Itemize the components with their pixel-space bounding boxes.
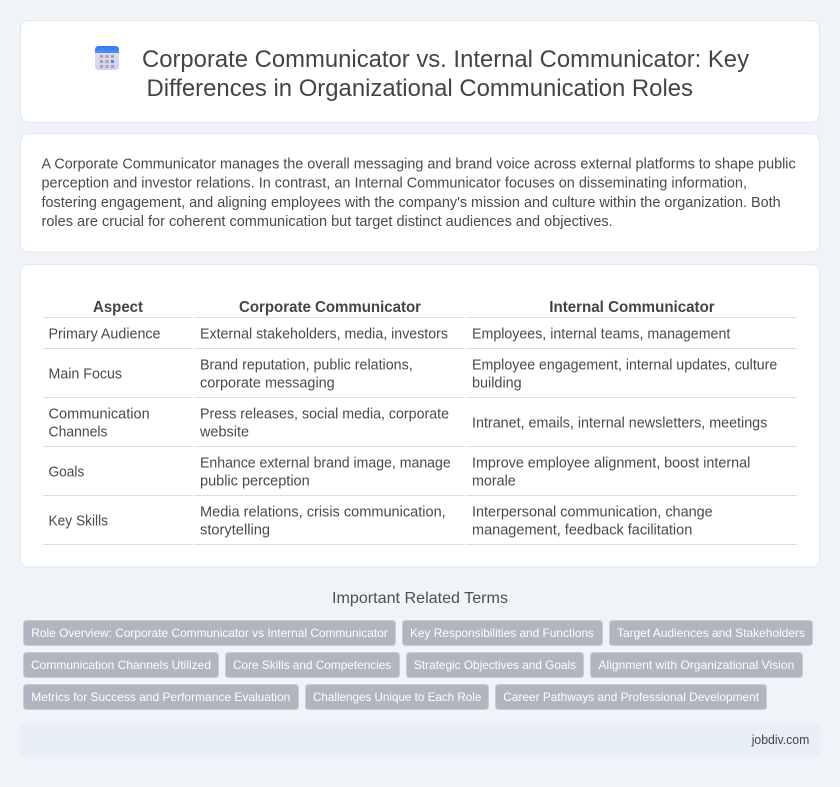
tag: Strategic Objectives and Goals [414, 658, 576, 672]
row: communication channels [48, 406, 767, 440]
row: key skills: Interpersonal communication, change [472, 504, 713, 520]
tag [24, 684, 298, 710]
row: primary audience: Primary Audience [48, 326, 161, 342]
row: goals: Improve employee alignment, boost internal [472, 456, 750, 472]
row: main focus: building [472, 376, 522, 392]
row: goals: morale [472, 474, 516, 490]
tag [496, 684, 766, 710]
row: goals: public perception [200, 474, 310, 490]
tag [610, 620, 812, 646]
table header: Internal Communicator [549, 299, 715, 316]
tag [24, 652, 218, 678]
row: primary audience: External stakeholders, media, investors [200, 326, 448, 342]
panel: intro paragraph [20, 134, 820, 252]
table header: Aspect [93, 299, 144, 316]
tag: Communication Channels Utilized [31, 658, 211, 672]
row: communication channels: website [199, 424, 249, 440]
row: key skills: storytelling [200, 522, 270, 538]
row: main focus: Brand reputation, public relations, [200, 358, 413, 374]
row: key skills [48, 504, 713, 538]
tag [590, 652, 802, 678]
title: Corporate Communicator vs. Internal Communicator: Key [142, 46, 749, 73]
tag: Role Overview: Corporate Communicator vs Internal Communicator [31, 626, 388, 640]
row: communication channels: Communication [48, 406, 150, 422]
tag: Challenges Unique to Each Role [313, 690, 482, 704]
row: key skills: Key Skills [48, 514, 108, 530]
tag [402, 620, 602, 646]
row: key skills: management, feedback facilitation [472, 522, 692, 538]
tag [306, 684, 488, 710]
row: communication channels: Press releases, social media, corporate [200, 406, 449, 422]
row: goals: Goals [48, 464, 84, 480]
panel: related term tags [24, 620, 812, 710]
row: goals: Enhance external brand image, manage [200, 456, 451, 472]
text block: intro: roles are crucial for coherent communication but target distinct audiences and objectives. [42, 214, 613, 230]
footer [20, 723, 820, 757]
tag [24, 620, 396, 646]
table header: Corporate Communicator [239, 299, 421, 316]
icon: calendar [95, 46, 119, 70]
row: primary audience [48, 326, 730, 342]
tag: Key Responsibilities and Functions [410, 626, 594, 640]
tag [226, 652, 400, 678]
tag: Core Skills and Competencies [233, 658, 391, 672]
row: key skills: Media relations, crisis communication, [200, 504, 446, 520]
row: communication channels: Channels [48, 424, 108, 440]
title: Differences in Organizational Communication Roles [146, 75, 693, 102]
row: main focus: corporate messaging [200, 376, 335, 392]
text block: intro: A Corporate Communicator manages the overall messaging and brand voice across external platforms to shape public [42, 156, 796, 172]
panel: title card [20, 20, 820, 122]
row: main focus: Main Focus [48, 366, 122, 382]
tag: Alignment with Organizational Vision [598, 658, 794, 672]
text block: intro [42, 156, 796, 230]
text block: intro: fostering engagement, and aligning employees with the company's mission and culture within the organization. Both [42, 195, 781, 211]
row: communication channels: Intranet, emails, internal newsletters, meetings [472, 416, 767, 432]
row: primary audience: Employees, internal teams, management [472, 326, 730, 342]
row: goals [48, 456, 750, 490]
heading: important related terms: Important Related Terms [332, 590, 508, 607]
tag: Target Audiences and Stakeholders [617, 626, 805, 640]
tag: Metrics for Success and Performance Evaluation [31, 690, 290, 704]
row: main focus [48, 358, 777, 392]
tag: Career Pathways and Professional Development [503, 690, 760, 704]
tag [406, 652, 584, 678]
title [142, 46, 749, 102]
table header [93, 299, 715, 316]
text block: intro: perception and investor relations. In contrast, an Internal Communicator focuses on disseminating information, [42, 176, 747, 192]
panel: comparison table [20, 264, 820, 567]
row: main focus: Employee engagement, internal updates, culture [472, 358, 777, 374]
footer: jobdiv.com [751, 732, 809, 747]
